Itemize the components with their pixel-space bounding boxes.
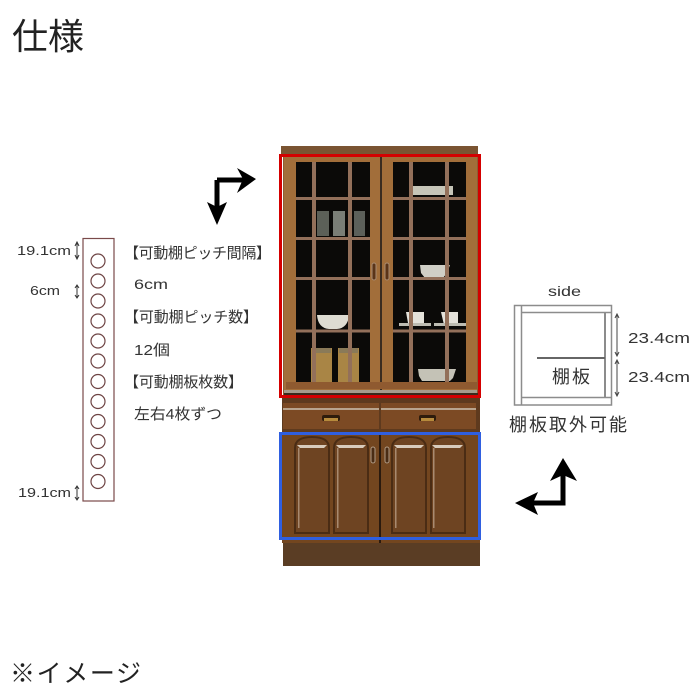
pitch count value: 12個 xyxy=(134,342,170,359)
spec text block xyxy=(124,245,271,423)
door handles xyxy=(372,263,389,280)
arrowhead: lower up xyxy=(550,458,577,481)
plinth xyxy=(283,543,480,566)
dimension arrow: top margin xyxy=(75,242,79,259)
shelf pin holes xyxy=(91,254,105,488)
drawers xyxy=(282,397,480,435)
lower door handles xyxy=(371,447,389,463)
pitch interval heading: 【可動棚ピッチ間隔】 xyxy=(124,245,271,262)
pitch interval value: 6cm xyxy=(134,276,168,292)
cabinet top cap xyxy=(281,146,478,155)
upper dimension label: 23.4cm xyxy=(628,331,690,347)
arrow: lower cabinet xyxy=(533,475,563,503)
glass right xyxy=(393,162,466,382)
door panels xyxy=(295,437,465,533)
glass left xyxy=(296,162,370,382)
side label: side xyxy=(548,283,581,299)
red highlight frame xyxy=(280,156,480,396)
pitch diagram xyxy=(83,238,114,501)
lower dimension label: 23.4cm xyxy=(628,370,690,386)
dishes left xyxy=(311,211,365,382)
title: 仕様 xyxy=(12,16,84,57)
lower dimension arrow xyxy=(615,360,619,396)
side panel outline xyxy=(83,238,114,501)
upper glass cabinet xyxy=(283,155,478,397)
dimension arrow: bottom margin xyxy=(75,486,79,500)
muntins left xyxy=(296,162,370,382)
side view frame xyxy=(514,306,612,405)
label: pitch: 6cm xyxy=(30,283,60,298)
arrowhead: upper right xyxy=(237,168,256,193)
arrow: upper cabinet xyxy=(217,180,243,207)
panel highlights xyxy=(297,445,463,528)
muntins right xyxy=(393,162,466,382)
label: bottom margin: 19.1cm xyxy=(18,485,71,500)
removable shelf note: 棚板取外可能 xyxy=(509,415,627,435)
side view diagram xyxy=(509,283,690,435)
image note: ※イメージ xyxy=(10,660,141,688)
blue highlight frame xyxy=(280,434,480,538)
shelf count value: 左右4枚ずつ xyxy=(134,406,222,423)
shelf count heading: 【可動棚板枚数】 xyxy=(124,374,243,391)
lower door rail xyxy=(284,382,478,397)
label: top margin: 19.1cm xyxy=(17,243,71,258)
dishes right xyxy=(399,186,466,381)
dimension arrow: pitch xyxy=(75,285,79,298)
cabinet illustration xyxy=(280,146,480,566)
shelf label: 棚板 xyxy=(552,367,590,387)
pitch count heading: 【可動棚ピッチ数】 xyxy=(124,309,258,326)
arrowhead: lower left xyxy=(515,492,538,515)
upper dimension arrow xyxy=(615,314,619,356)
shelf board line xyxy=(537,357,605,359)
arrowhead: upper down xyxy=(207,202,227,225)
lower doors xyxy=(282,433,480,543)
